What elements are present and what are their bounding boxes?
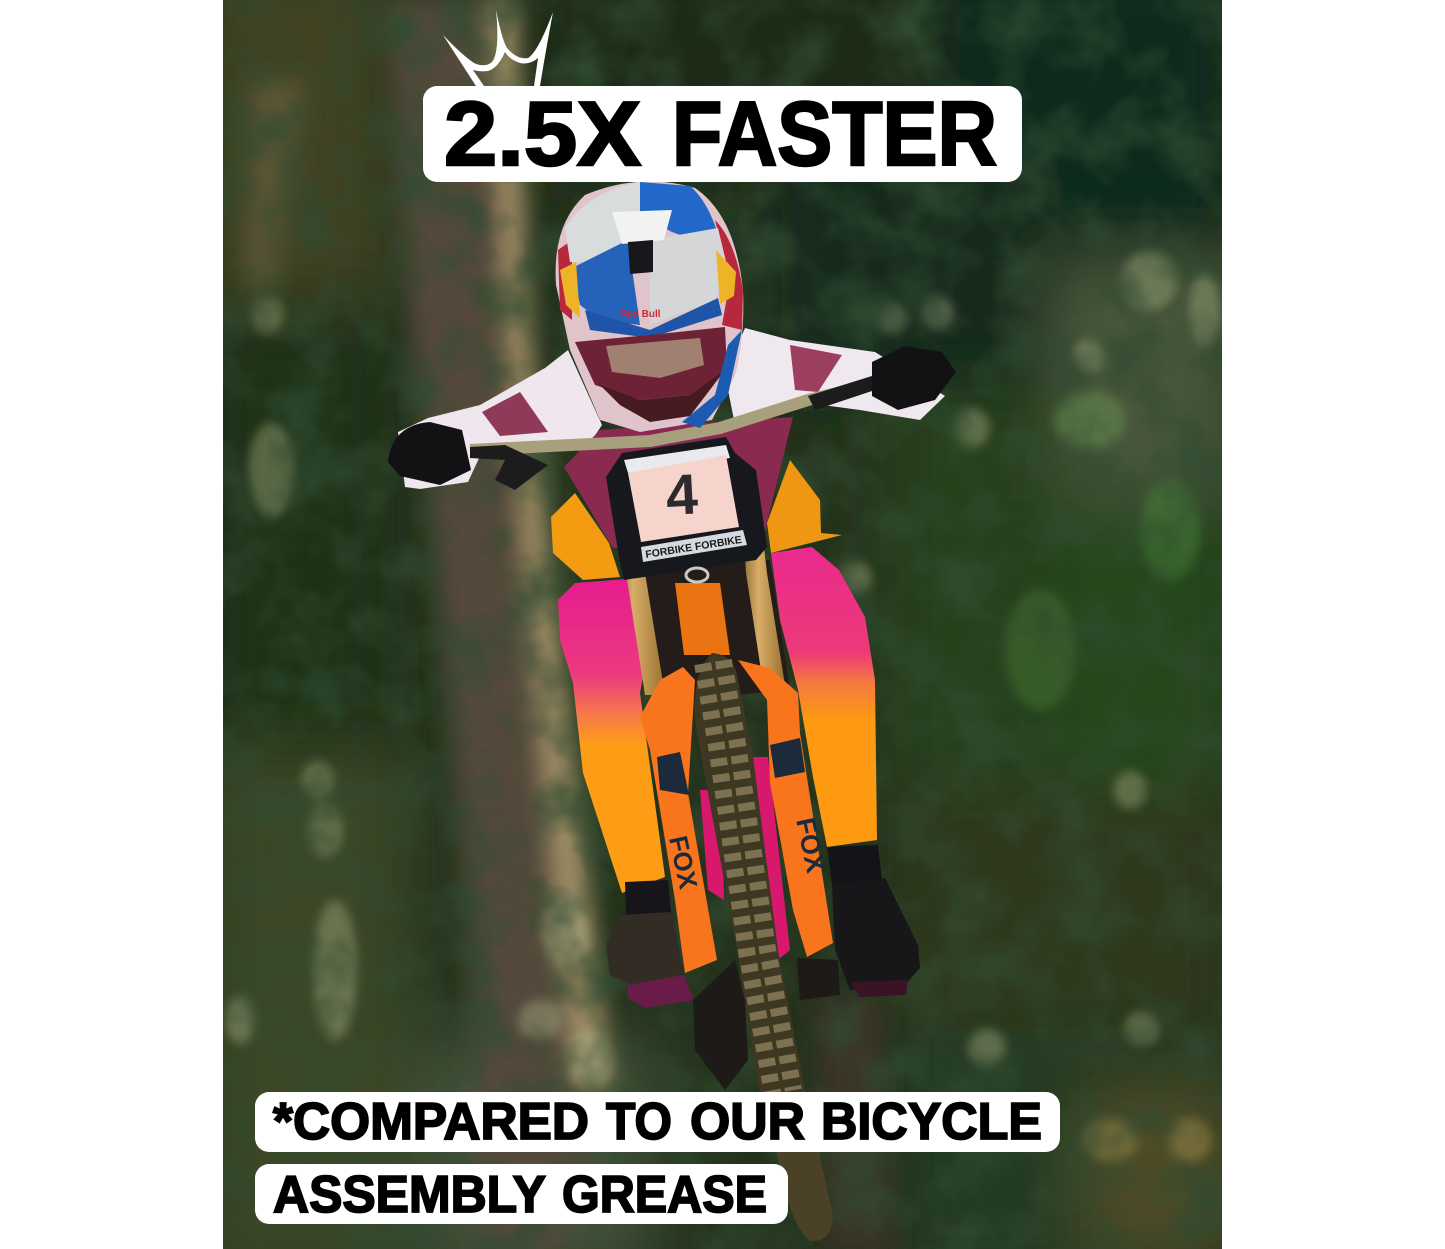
fork lower left [640,667,717,973]
footnote pill line 1: *COMPARED [273,1093,589,1151]
front tyre [695,653,806,1095]
fork lower right [738,660,833,957]
handlebar [470,385,870,450]
rider and bike [388,181,956,1241]
brake levers [470,375,875,490]
right sock and shoe [827,845,920,997]
bokeh highlights [225,250,1221,1162]
jersey arms [398,328,945,489]
torso maroon jersey [564,417,793,548]
helmet: Red Bull [620,309,661,320]
footnote pill line 2 [255,1164,788,1224]
footnote pill line 1 [255,1092,1060,1152]
right leg [771,547,877,847]
footnote pill line 1: OUR [690,1093,805,1151]
left leg [558,578,665,893]
right glove [872,346,956,410]
footnote pill line 1: TO [606,1093,672,1151]
crown logo [443,10,553,86]
orange rear shock [675,583,730,655]
number plate: 4 [664,462,700,528]
headline pill [423,84,1022,185]
left glove [388,422,471,485]
magenta frame behind wheel [700,757,790,960]
footnote pill line 1: BICYCLE [821,1093,1042,1151]
orange shorts left [551,493,620,580]
headline text: 2.5X [444,84,641,185]
helmet [556,181,743,432]
fork lower left: FOX [663,833,704,892]
footnote pill line 2: GREASE [562,1166,767,1224]
tree trunk [245,0,895,1249]
footnote pill line 2: ASSEMBLY [273,1166,545,1224]
orange shorts right [767,460,842,553]
fork lower right: FOX [790,815,831,876]
left sock and shoe [606,880,694,1008]
photo background: blurred forest [200,0,1240,1249]
axle and brake hardware [693,958,840,1090]
headline text: FASTER [672,84,997,185]
fork stanchion right [741,480,785,690]
dark area behind fork [625,560,790,700]
number plate: FORBIKE FORBIKE [645,534,743,561]
tyre end below footnote [765,1090,833,1241]
infographic canvas [223,0,1222,1249]
background mottling [223,0,1222,1249]
number plate [606,437,767,582]
fork stanchion left [612,505,665,695]
